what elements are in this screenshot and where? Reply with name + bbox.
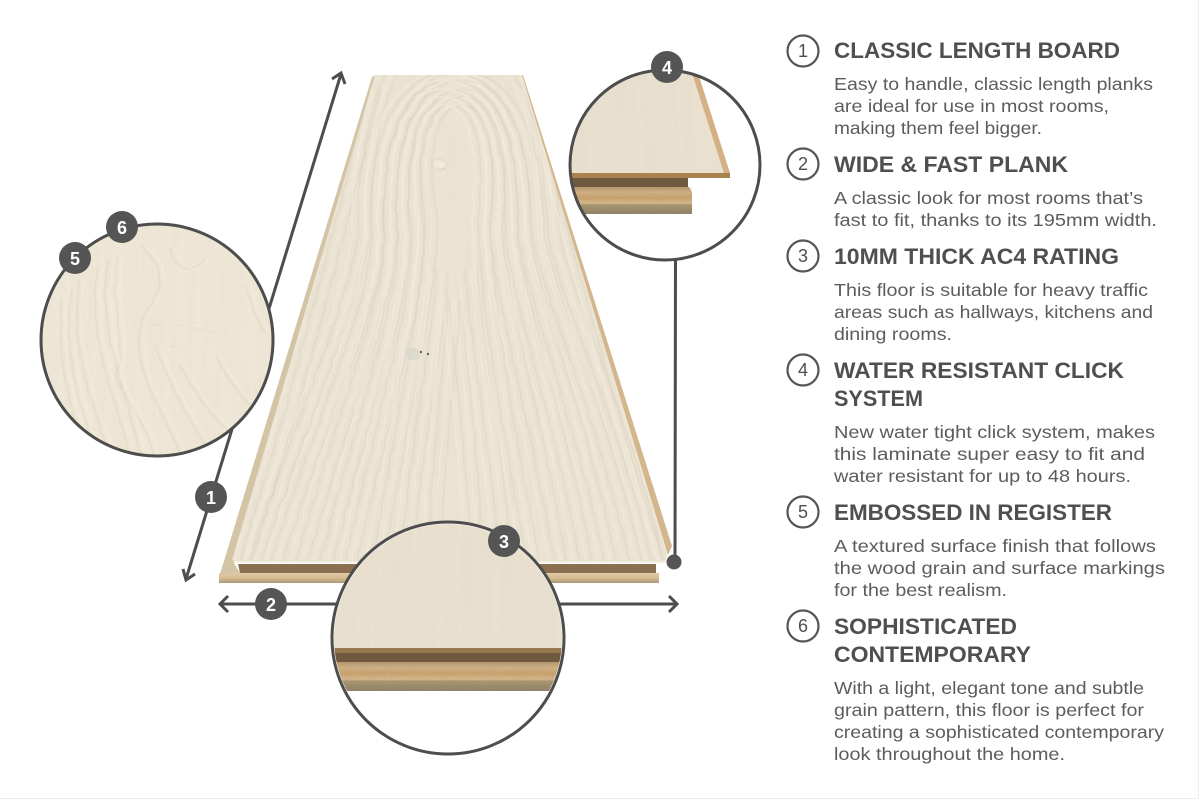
tongue core profile xyxy=(570,187,692,214)
plank: lower core edge xyxy=(219,573,659,583)
feature 2: wide and fast plank: fast to fit, thanks to its 195mm width. xyxy=(834,210,1157,230)
magnifier circle: click system detail (4) xyxy=(570,70,760,260)
connector line: callout 4 to plank corner xyxy=(666,256,682,570)
feature 4: water resistant click system: WATER RESISTANT CLICK xyxy=(834,358,1124,383)
feature 1: classic length board: are ideal for use in most rooms, xyxy=(834,96,1109,116)
feature 4: water resistant click system: New water tight click system, makes xyxy=(834,422,1155,442)
feature 1: classic length board: CLASSIC LENGTH BOARD xyxy=(834,38,1120,63)
feature 6: sophisticated contemporary: With a light, elegant tone and subtle xyxy=(834,678,1144,698)
feature 1: classic length board: Easy to handle, classic length planks xyxy=(834,74,1153,94)
feature 3: thickness and rating: dining rooms. xyxy=(834,324,952,344)
feature 5: embossed in register: the wood grain and surface markings xyxy=(834,558,1165,578)
badge 4 xyxy=(651,51,683,83)
feature 5: embossed in register: for the best realism. xyxy=(834,580,1007,600)
feature 4: water resistant click system: water resistant for up to 48 hours. xyxy=(833,466,1131,486)
feature 3: thickness and rating: 3 xyxy=(798,246,808,266)
magnifier circle: thickness detail (3) xyxy=(330,520,566,754)
feature 4: water resistant click system: SYSTEM xyxy=(834,386,923,411)
badge 1 xyxy=(195,481,227,513)
feature 6: sophisticated contemporary: 6 xyxy=(798,616,808,636)
plank: shadow groove xyxy=(238,564,656,573)
badge 2: 2 xyxy=(266,595,276,615)
feature 6: sophisticated contemporary: look throughout the home. xyxy=(834,744,1065,764)
feature 2: wide and fast plank: 2 xyxy=(798,154,808,174)
feature 3: thickness and rating: This floor is suitable for heavy traffic xyxy=(834,280,1148,300)
badge 5: 5 xyxy=(70,249,80,269)
badge 6 xyxy=(106,211,138,243)
feature 5: embossed in register xyxy=(788,496,1165,600)
plank image xyxy=(219,72,680,583)
magnifier circle: surface detail (5, 6) xyxy=(40,222,275,460)
feature 6: sophisticated contemporary: SOPHISTICATED xyxy=(834,614,1017,639)
feature 5: embossed in register: 5 xyxy=(798,502,808,522)
surface grain xyxy=(570,70,692,173)
feature 1: classic length board: 1 xyxy=(798,41,808,61)
feature 4: water resistant click system: 4 xyxy=(798,360,808,380)
plank: right edge xyxy=(522,75,672,555)
feature 6: sophisticated contemporary: creating a sophisticated contemporary xyxy=(834,722,1164,742)
arrow 1: board length xyxy=(183,73,345,580)
feature 4: water resistant click system: this laminate super easy to fit and xyxy=(834,444,1145,464)
feature 6: sophisticated contemporary xyxy=(788,610,1164,764)
feature 2: wide and fast plank xyxy=(788,148,1157,230)
feature 6: sophisticated contemporary: grain pattern, this floor is perfect for xyxy=(834,700,1144,720)
badge 3 xyxy=(488,525,520,557)
badge 6: 6 xyxy=(117,218,127,238)
feature 6: sophisticated contemporary: CONTEMPORARY xyxy=(834,642,1031,667)
badge 2 xyxy=(255,588,287,620)
plank: small knot xyxy=(405,348,429,360)
feature 3: thickness and rating xyxy=(788,240,1153,344)
feature 4: water resistant click system xyxy=(788,354,1155,486)
feature 1: classic length board xyxy=(788,36,1153,138)
surface wedge xyxy=(570,70,724,173)
badge 1: 1 xyxy=(206,488,216,508)
core edge layers xyxy=(330,648,566,653)
plank: top surface xyxy=(232,75,670,563)
feature 3: thickness and rating: areas such as hallways, kitchens and xyxy=(834,302,1153,322)
plank: left side edge xyxy=(220,75,376,574)
feature 2: wide and fast plank: WIDE & FAST PLANK xyxy=(834,152,1068,177)
badge 4: 4 xyxy=(662,58,672,78)
plank: wood grain xyxy=(220,72,680,570)
feature 3: thickness and rating: 10MM THICK AC4 RATING xyxy=(834,244,1119,269)
surface layer xyxy=(330,520,566,648)
badge 3: 3 xyxy=(499,532,509,552)
badge 5 xyxy=(59,242,91,274)
feature 2: wide and fast plank: A classic look for most rooms that’s xyxy=(834,188,1143,208)
feature 1: classic length board: making them feel bigger. xyxy=(834,118,1042,138)
feature 5: embossed in register: A textured surface finish that follows xyxy=(834,536,1156,556)
feature 5: embossed in register: EMBOSSED IN REGISTER xyxy=(834,500,1112,525)
arrow 2: board width xyxy=(220,596,677,612)
